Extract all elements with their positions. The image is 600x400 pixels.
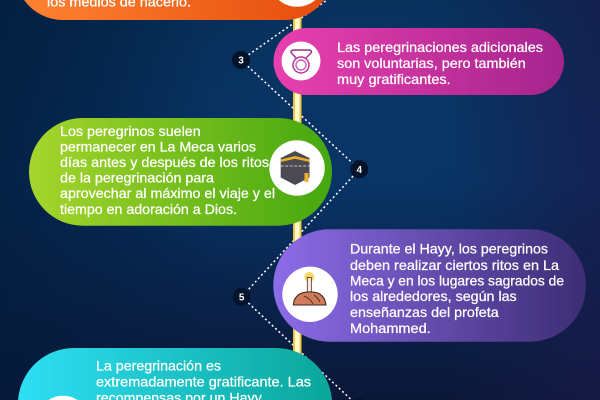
icon: Kaaba [269, 140, 325, 196]
marker: step 5 [233, 288, 251, 306]
marker: step 6 [353, 398, 365, 400]
text: step 6: La peregrinación es [96, 358, 221, 374]
text: step 4: de la peregrinación para [60, 170, 214, 186]
panel: step 3 pink [274, 28, 564, 95]
text: step 5: Durante el Hayy, los peregrinos [350, 240, 548, 256]
marker: step 3 [232, 51, 250, 69]
text: step 5: Mohammed. [350, 320, 431, 336]
icon: step 6 circle [48, 396, 78, 400]
text: step 4 [60, 123, 275, 217]
text: step 3: Las peregrinaciones adicionales [337, 39, 543, 55]
marker: step 4: 4 [357, 165, 363, 176]
text: step 5 [350, 240, 564, 336]
panel: step 4 green [29, 118, 332, 226]
text: step 3 [337, 39, 543, 87]
text: step 5: los alrededores, según las [350, 288, 517, 304]
panel: step 2 orange [24, 0, 324, 20]
text: step 3: muy gratificantes. [337, 71, 451, 87]
icon: step 2 circle [279, 0, 315, 7]
text: step 4: tiempo en adoración a Dios. [60, 201, 237, 217]
marker: step 4 [350, 160, 368, 178]
marker: step 5: 5 [239, 292, 245, 303]
text: step 5: deben realizar ciertos ritos en La [350, 257, 559, 273]
text: step 5: Meca y en los lugares sagrados de [350, 273, 564, 289]
text: step 5: enseñanzas del profeta [350, 304, 499, 320]
panel: step 6 teal [18, 348, 332, 400]
text: step 6: extremadamente gratificante. Las [96, 374, 311, 390]
text: step 4: permanecer en La Meca varios [60, 139, 256, 155]
text: step 4: Los peregrinos suelen [60, 123, 201, 139]
text: step 4: aprovechar al máximo el viaje y el [60, 185, 275, 201]
icon: medal [282, 42, 320, 80]
text: step 3: son voluntarias, pero también [337, 55, 526, 71]
dotted connector path [241, 0, 359, 400]
marker: step 3: 3 [238, 56, 244, 67]
text: step 4: días antes y después de los ritos [60, 154, 269, 170]
central timeline spine [293, 0, 302, 360]
panel: step 5 purple [273, 229, 586, 342]
text: step 6 [96, 358, 311, 400]
icon: candle on mountain [282, 267, 338, 322]
